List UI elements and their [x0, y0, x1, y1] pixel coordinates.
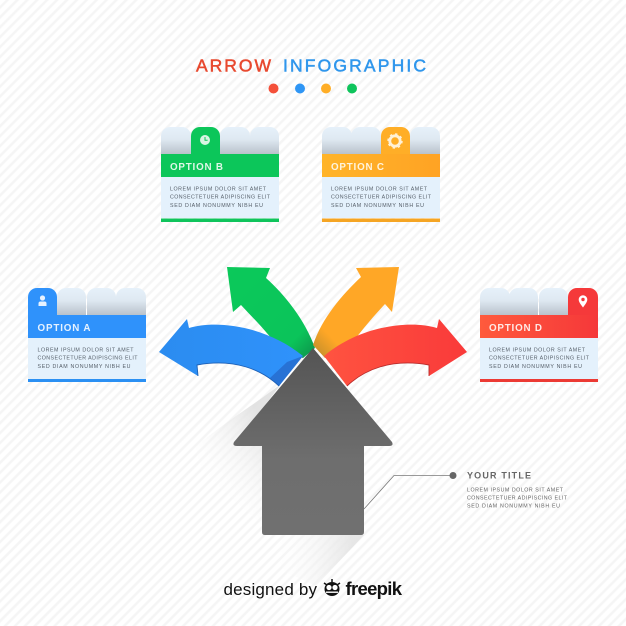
text: option A: LOREM IPSUM DOLOR SIT AMET — [38, 348, 134, 354]
icon: clock — [200, 135, 210, 145]
text: option D: CONSECTETUER ADIPISCING ELIT — [489, 356, 590, 362]
text: option B — [170, 186, 271, 209]
leader line — [364, 472, 456, 509]
panel: option B — [161, 127, 279, 222]
text: option A: CONSECTETUER ADIPISCING ELIT — [38, 356, 138, 362]
text: option C: LOREM IPSUM DOLOR SIT AMET — [331, 186, 428, 192]
icon: freepik bee — [324, 579, 340, 596]
text: your title: CONSECTETUER ADIPISCING ELIT — [467, 496, 568, 502]
text: your title: SED DIAM NONUMMY NIBH EU — [467, 504, 560, 510]
text: option C: CONSECTETUER ADIPISCING ELIT — [331, 195, 432, 201]
title — [196, 56, 426, 76]
icon: person — [38, 295, 46, 306]
text: your title: LOREM IPSUM DOLOR SIT AMET — [467, 488, 564, 494]
text: option D: SED DIAM NONUMMY NIBH EU — [489, 364, 582, 370]
title: ARROW — [196, 56, 271, 76]
text: option C: SED DIAM NONUMMY NIBH EU — [331, 203, 424, 209]
panel: option D — [480, 288, 598, 382]
icon: map pin — [579, 295, 587, 308]
heading: option A: OPTION A — [38, 323, 90, 334]
text: option B: LOREM IPSUM DOLOR SIT AMET — [170, 186, 267, 192]
text: option B: SED DIAM NONUMMY NIBH EU — [170, 203, 263, 209]
footer: designed by freepik — [224, 578, 403, 599]
text: option D: LOREM IPSUM DOLOR SIT AMET — [489, 348, 586, 354]
arrow: blue — [159, 319, 303, 386]
text: option A: SED DIAM NONUMMY NIBH EU — [38, 364, 131, 370]
text: option D — [489, 348, 590, 370]
arrow: red — [324, 319, 467, 386]
tab: option D — [568, 288, 598, 316]
arrow long shadow — [196, 384, 364, 586]
title: INFOGRAPHIC — [283, 56, 426, 76]
arrow: orange — [313, 267, 399, 358]
tab: option C — [381, 127, 410, 155]
tab: option A — [28, 288, 57, 316]
heading: option D: OPTION D — [489, 323, 542, 334]
text: option C — [331, 186, 432, 209]
arrow: green — [227, 267, 315, 358]
panel: option A — [28, 288, 146, 382]
icon: gear — [388, 134, 402, 148]
tab: option B — [191, 127, 220, 155]
arrow: gray main — [233, 348, 393, 535]
heading: option B: OPTION B — [170, 162, 223, 173]
text: your title — [467, 488, 568, 510]
footer: designed by freepik: freepik — [346, 578, 403, 599]
footer: designed by freepik: designed by — [224, 580, 318, 599]
decorative colour dots — [268, 84, 357, 94]
text: option A — [38, 348, 138, 370]
heading: your title: YOUR TITLE — [467, 470, 531, 480]
heading: option C: OPTION C — [331, 162, 384, 173]
text: option B: CONSECTETUER ADIPISCING ELIT — [170, 195, 271, 201]
panel: option C — [322, 127, 440, 222]
